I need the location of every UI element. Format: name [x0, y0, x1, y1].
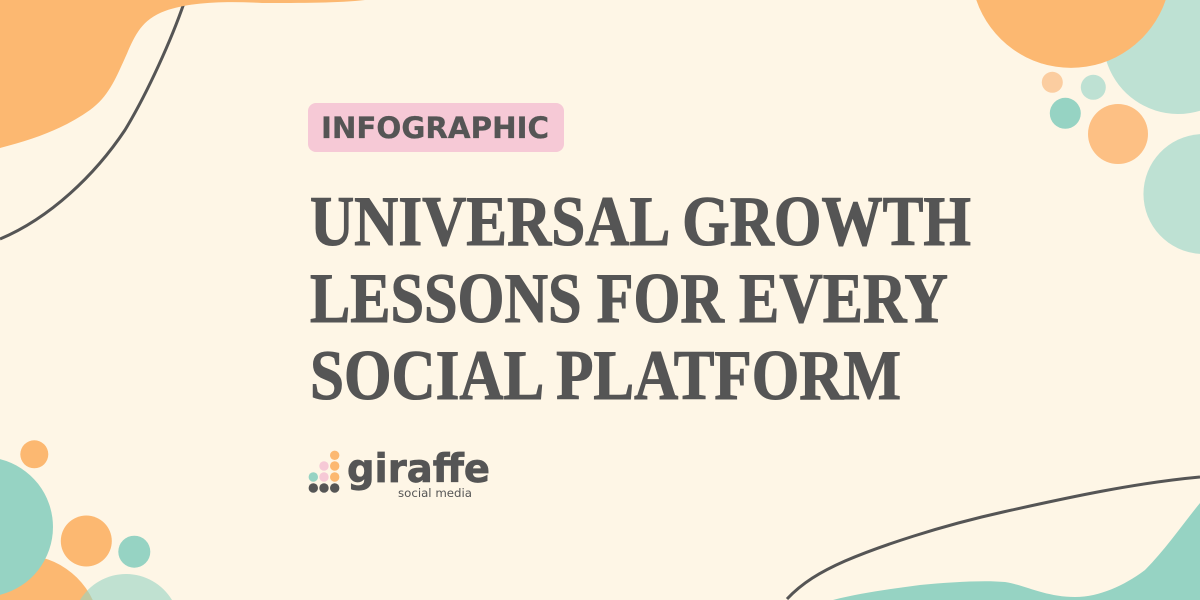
title: SOCIAL PLATFORM [310, 337, 901, 415]
logo tagline: social media [398, 486, 472, 500]
logo wordmark: giraffe [347, 447, 490, 492]
circle cluster: bottom left [0, 440, 172, 600]
tag: infographic: INFOGRAPHIC [321, 111, 549, 145]
blob: top left orange [0, 0, 365, 148]
title: LESSONS FOR EVERY [310, 260, 948, 338]
icon: logo dots [309, 451, 339, 493]
logo: giraffe social media [309, 447, 490, 500]
circle cluster: top right [976, 0, 1200, 254]
curved line: top left [0, 3, 184, 239]
tag: infographic [308, 103, 564, 152]
title: UNIVERSAL GROWTH [310, 183, 971, 261]
curved line: bottom right [787, 477, 1200, 599]
title [310, 183, 971, 415]
blob: bottom right teal [833, 503, 1200, 600]
